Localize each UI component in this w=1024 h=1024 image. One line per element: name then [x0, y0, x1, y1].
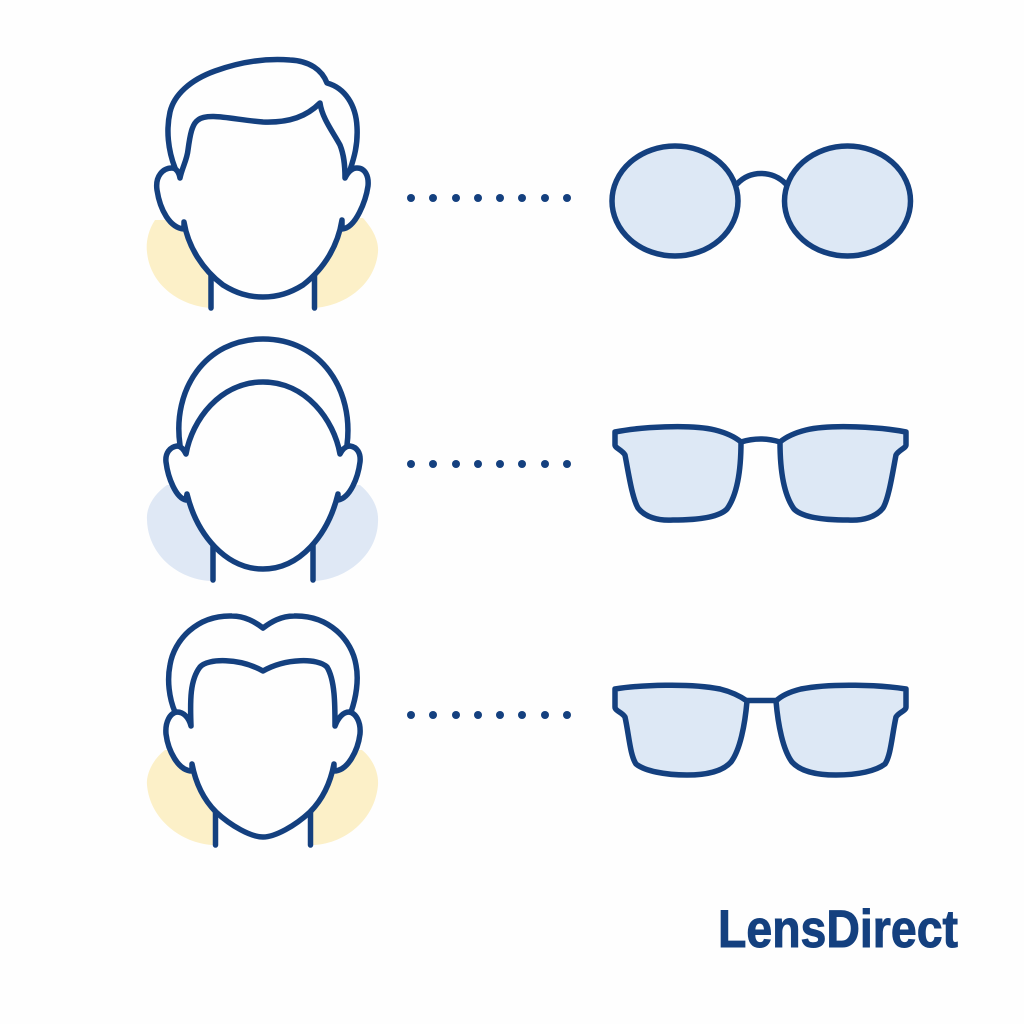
neck [211, 270, 314, 308]
neck [216, 805, 310, 845]
face and ears [166, 382, 360, 569]
glasses 2: soft square [615, 427, 906, 520]
hair [169, 616, 357, 712]
hair [168, 59, 357, 170]
shoulder blob blue [147, 485, 378, 581]
row 3: face with heart hairline [147, 616, 378, 850]
shoulder blob yellow [147, 218, 378, 308]
face and ears [157, 103, 368, 297]
logo: LensDirect: LensDirect [718, 900, 958, 959]
neck [213, 540, 313, 580]
dots row 3 [407, 711, 571, 719]
face and ears [166, 661, 360, 837]
hair [179, 339, 348, 445]
neck opening [211, 240, 315, 312]
row 2: face with round head [147, 339, 378, 585]
shoulder blob yellow [147, 750, 378, 845]
dots row 2 [407, 460, 571, 468]
row 1: face with short hair [147, 59, 378, 312]
glasses 1: round [612, 146, 910, 256]
glasses 3: browline square [615, 685, 906, 775]
neck opening [215, 780, 311, 850]
dots row 1 [407, 194, 571, 202]
neck opening [213, 510, 313, 585]
